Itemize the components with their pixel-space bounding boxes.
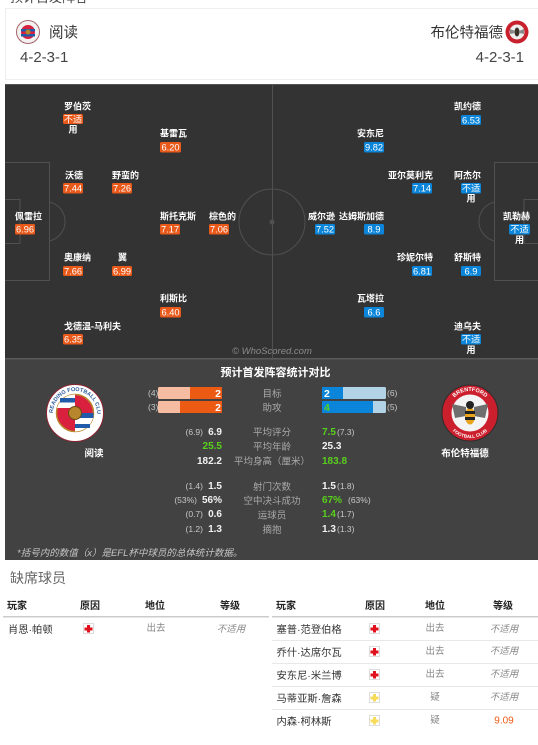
home stat values: (53%) (174, 495, 197, 505)
bar: away goals: 2 (324, 388, 330, 400)
stat labels: 运球员 (258, 510, 286, 522)
icon: Reading small crest (16, 20, 40, 44)
player: 迪乌夫: 迪乌夫 (454, 320, 481, 332)
row: 塞普·范登伯格: 不适用 (490, 624, 520, 635)
away stat values: 67% (322, 495, 342, 506)
table: away missing players: 玩家 (276, 599, 296, 612)
player: 迪乌夫: 用 (466, 345, 476, 355)
home stat values: 1.3 (208, 524, 222, 535)
player: 珍妮尔特: 珍妮尔特 (397, 252, 433, 262)
heading: missing players: 缺席球员 (10, 570, 66, 586)
player: 达姆斯加德 (339, 210, 384, 234)
home stat values: 182.2 (197, 456, 222, 467)
home stat values: 56% (202, 495, 222, 506)
player: 基雷瓦: 基雷瓦 (160, 128, 187, 138)
icon: Reading crest: READING FOOTBALL CLUB (49, 387, 101, 414)
icon: Reading crest (46, 384, 104, 442)
away stat values: (7.3) (337, 427, 355, 437)
icon: Brentford small crest (506, 20, 528, 44)
player: 沃德: 7.44 (64, 184, 82, 194)
player: 凯勒赫: 凯勒赫 (503, 210, 530, 222)
player: 舒斯特: 舒斯特 (454, 252, 481, 262)
player: 凯勒赫: 不适 (510, 224, 529, 234)
player: 斯托克斯 (160, 210, 196, 234)
player: 罗伯茨: 罗伯茨 (64, 100, 91, 112)
row: 塞普·范登伯格: 出去 (425, 622, 445, 634)
row: 安东尼·米兰博: 不适用 (490, 669, 520, 680)
player: 瓦塔拉: 瓦塔拉 (357, 292, 384, 304)
row: 肖恩·帕顿: 出去 (146, 622, 166, 634)
player: 野蛮的 (112, 170, 139, 194)
home stat values: 6.9 (208, 427, 222, 438)
player: 威尔逊: 7.52 (316, 224, 334, 234)
watermark: © WhoScored.com (232, 346, 312, 357)
bar: away assists: 4 (324, 402, 330, 414)
player: 凯约德: 凯约德 (454, 100, 481, 112)
icon: Brentford crest: FOOTBALL CLUB (452, 428, 487, 438)
player: 沃德: 沃德 (65, 170, 83, 180)
player: 瓦塔拉 (357, 292, 384, 318)
player: 瓦塔拉: 6.6 (368, 308, 380, 318)
stat labels: 摘抱 (262, 524, 282, 536)
player: 迪乌夫: 不适 (462, 334, 480, 344)
player: 安东尼: 9.82 (365, 142, 383, 152)
away stat values: (63%) (348, 495, 371, 505)
player: 阿杰尔: 不适 (462, 184, 480, 194)
player: 罗伯茨: 不适 (64, 114, 82, 124)
row: 乔什·达席尔瓦 (276, 645, 520, 659)
player: 凯勒赫 (503, 210, 530, 245)
player: 亚尔莫利克: 亚尔莫利克 (388, 170, 433, 180)
player: 迪乌夫 (454, 320, 481, 355)
table: home missing players: 地位 (145, 599, 165, 612)
player: 戈德温-马利夫: 戈德温-马利夫 (64, 320, 121, 332)
player: 基雷瓦: 6.20 (161, 142, 180, 152)
panel: pitch (5, 84, 538, 359)
player: 罗伯茨 (63, 100, 91, 134)
stat labels: 射门次数 (253, 481, 291, 493)
row: 内森·柯林斯: 内森·柯林斯 (276, 715, 331, 728)
row: 马蒂亚斯·詹森: 不适用 (490, 692, 520, 703)
player: 斯托克斯: 7.17 (161, 224, 179, 234)
table: away missing players: 地位 (425, 599, 445, 612)
bar: home assists: 2 (215, 402, 221, 414)
stat labels: 助攻 (262, 402, 282, 414)
player: 戈德温-马利夫 (63, 320, 121, 344)
row: 内森·柯林斯: 疑 (430, 715, 440, 726)
player: 戈德温-马利夫: 6.35 (64, 334, 82, 344)
player: 利斯比: 6.40 (161, 308, 180, 318)
bar: away assists: (5) (387, 402, 398, 412)
table: away missing players: 原因 (365, 600, 385, 612)
player: 凯勒赫: 用 (515, 235, 524, 245)
player: 奥康纳: 奥康纳 (64, 252, 91, 262)
home stat values: 0.6 (208, 509, 222, 520)
bar: home goals: 2 (215, 388, 221, 400)
row: 肖恩·帕顿: 肖恩·帕顿 (8, 623, 53, 636)
bar: away goals (322, 387, 398, 400)
player: 珍妮尔特: 6.81 (413, 266, 431, 276)
player: 沃德 (63, 170, 83, 194)
player: 利斯比 (160, 292, 187, 318)
away stat values: (1.7) (337, 509, 355, 519)
bar: home assists: (3) (148, 402, 159, 412)
table: home missing players: 原因 (80, 600, 100, 612)
player: 棕色的: 7.06 (210, 224, 228, 234)
table: away missing players: 等级 (493, 599, 513, 612)
away team label: 布伦特福德 (441, 448, 489, 460)
comparison title: 预计首发阵容统计对比 (220, 365, 330, 379)
bar: home goals (148, 387, 222, 400)
away formation: 4-2-3-1 (476, 49, 524, 66)
stat labels: 平均年龄 (253, 441, 291, 453)
player: 野蛮的: 野蛮的 (112, 170, 139, 180)
player: 佩雷拉: 佩雷拉 (15, 210, 42, 222)
player: 亚尔莫利克: 7.14 (413, 184, 431, 194)
player: 达姆斯加德: 8.9 (368, 224, 380, 234)
player: 佩雷拉: 6.96 (16, 224, 34, 234)
home stat values: 1.5 (208, 481, 222, 492)
row: 安东尼·米兰博: 安东尼·米兰博 (276, 669, 342, 682)
stat labels: 平均身高（厘米） (234, 456, 310, 468)
player: 威尔逊 (308, 210, 335, 234)
player: 达姆斯加德: 达姆斯加德 (339, 210, 384, 222)
row: 肖恩·帕顿 (8, 622, 247, 636)
home formation: 4-2-3-1 (20, 49, 68, 66)
row: 马蒂亚斯·詹森: 马蒂亚斯·詹森 (276, 692, 342, 705)
home stat values: (0.7) (186, 509, 203, 519)
row: 安东尼·米兰博 (276, 668, 520, 682)
icon: Brentford crest (442, 384, 498, 442)
player: 舒斯特: 6.9 (465, 266, 477, 276)
player: 棕色的 (209, 210, 236, 234)
bar: away goals: (6) (387, 388, 398, 398)
footnote: *括号内的数值（x）是EFL杯中球员的总体统计数据。 (17, 547, 242, 559)
stat labels: 空中决斗成功 (243, 495, 301, 507)
stat labels: 目标 (262, 388, 282, 400)
player: 罗伯茨: 用 (68, 124, 78, 134)
player: 阿杰尔: 阿杰尔 (454, 170, 481, 180)
away stat values: 7.5 (322, 427, 336, 438)
row: 马蒂亚斯·詹森: 疑 (430, 692, 440, 703)
row: 马蒂亚斯·詹森 (276, 692, 520, 705)
player: 舒斯特 (454, 252, 481, 276)
player: 奥康纳 (63, 252, 91, 276)
player: 奥康纳: 7.66 (64, 266, 82, 276)
away stat values: 1.4 (322, 509, 336, 520)
table: home missing players: 等级 (220, 599, 240, 612)
away stat values: (1.3) (337, 524, 355, 534)
player: 棕色的: 棕色的 (209, 210, 236, 222)
player: 佩雷拉 (15, 210, 42, 234)
table: home missing players: 玩家 (7, 599, 27, 612)
home team name: 阅读 (49, 24, 78, 42)
panel: lineup stat comparison (5, 358, 538, 560)
row: 乔什·达席尔瓦: 不适用 (490, 646, 520, 657)
away stat values (322, 427, 371, 535)
stat labels: 平均评分 (253, 426, 291, 438)
row: 肖恩·帕顿: 不适用 (217, 624, 247, 635)
icon: Brentford crest: BRENTFORD (452, 387, 488, 398)
row: 内森·柯林斯: 9.09 (494, 716, 514, 726)
row: 塞普·范登伯格 (276, 622, 520, 636)
away stat values: (1.8) (337, 481, 355, 491)
player: 翼 (112, 252, 132, 276)
home stat values: (1.2) (186, 524, 203, 534)
player: 凯约德 (454, 100, 481, 126)
row: 安东尼·米兰博: 出去 (425, 668, 445, 680)
away stat values: 1.3 (322, 524, 336, 535)
away team name: 布伦特福德 (430, 24, 503, 42)
home stat values: 25.5 (203, 441, 222, 452)
player: 安东尼 (357, 128, 384, 152)
player: 安东尼: 安东尼 (357, 128, 384, 138)
player: 威尔逊: 威尔逊 (308, 210, 335, 222)
row: 塞普·范登伯格: 塞普·范登伯格 (276, 623, 342, 636)
away stat values: 25.3 (322, 441, 342, 452)
row: 乔什·达席尔瓦: 出去 (425, 645, 445, 657)
player: 翼: 6.99 (113, 266, 131, 276)
home stat values (174, 427, 222, 535)
player: 利斯比: 利斯比 (160, 292, 187, 304)
home team label: 阅读 (84, 448, 104, 460)
panel: team header (6, 8, 538, 80)
player: 斯托克斯: 斯托克斯 (160, 210, 196, 222)
stat labels (234, 388, 310, 536)
home stat values: (6.9) (186, 427, 203, 437)
player: 凯约德: 6.53 (462, 116, 480, 126)
home stat values: (1.4) (186, 481, 203, 491)
player: 翼: 翼 (118, 252, 127, 262)
bar: home goals: (4) (148, 388, 159, 398)
player: 基雷瓦 (160, 128, 187, 152)
row: 乔什·达席尔瓦: 乔什·达席尔瓦 (276, 646, 342, 659)
player: 野蛮的: 7.26 (113, 184, 131, 194)
row: 内森·柯林斯 (276, 715, 514, 728)
player: 阿杰尔: 用 (466, 194, 476, 204)
away stat values: 1.5 (322, 481, 336, 492)
bar: home assists (148, 401, 222, 414)
player: 珍妮尔特 (397, 252, 433, 276)
table: home missing players (3, 599, 269, 636)
player: 亚尔莫利克 (388, 170, 433, 194)
away stat values: 183.8 (322, 456, 347, 467)
player: 阿杰尔 (454, 170, 481, 204)
table: away missing players (272, 599, 538, 728)
bar: away assists (322, 401, 398, 414)
